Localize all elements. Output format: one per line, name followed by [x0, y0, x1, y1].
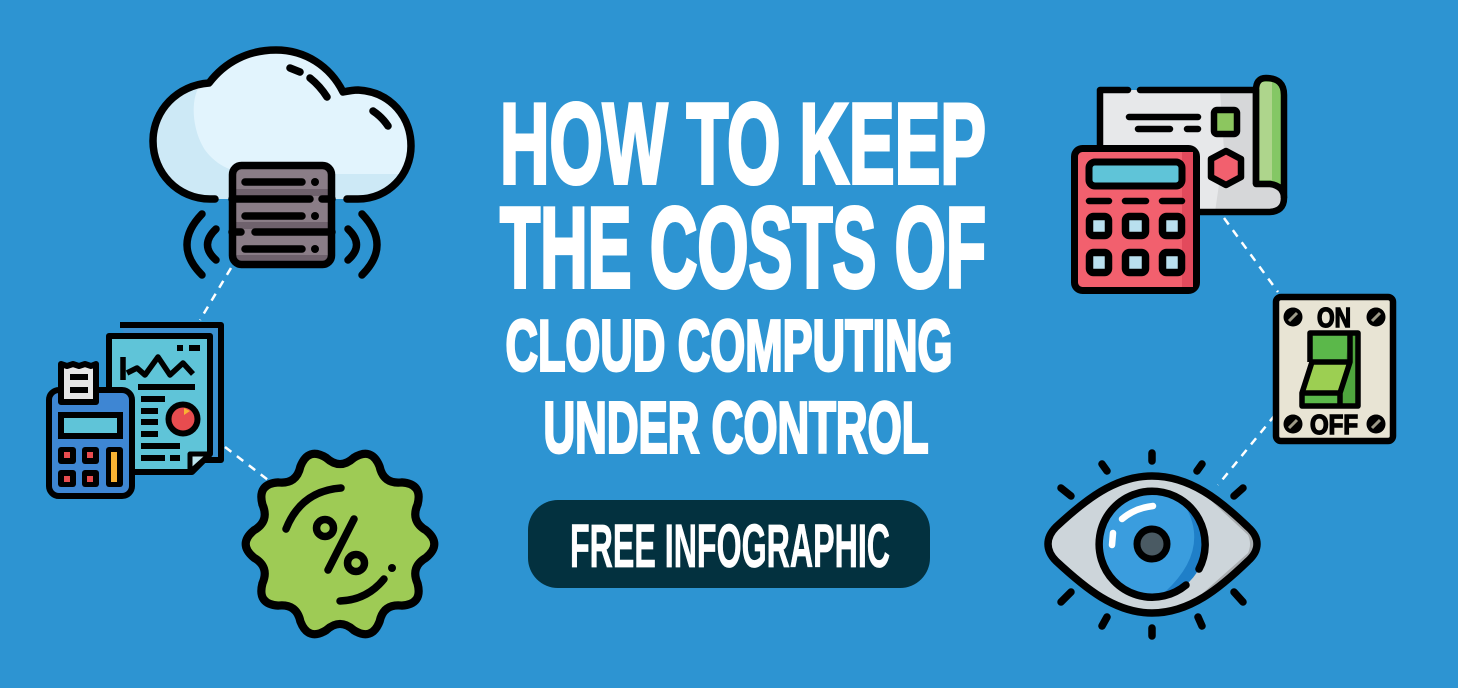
icon: blueprint and calculator — [1074, 78, 1284, 290]
icon: cloud server — [153, 40, 420, 275]
dashed connector: switch to eye — [1218, 415, 1275, 485]
icon: on/off switch: OFF — [1310, 409, 1358, 440]
icon: report and payment terminal — [49, 325, 221, 496]
dashed connector: cloud to report — [200, 268, 231, 320]
icon: discount badge — [246, 454, 434, 634]
title: THE COSTS OF — [500, 185, 986, 312]
button: free infographic: FREE INFOGRAPHIC — [570, 512, 890, 580]
dashed connector: calculator to switch — [1224, 218, 1278, 292]
button: free infographic — [528, 500, 930, 588]
icon: on/off switch: ON — [1317, 302, 1351, 333]
title: CLOUD COMPUTING — [506, 306, 952, 386]
icon: eye — [1048, 453, 1260, 636]
icon: on/off switch — [1276, 297, 1393, 441]
title: UNDER CONTROL — [544, 388, 928, 468]
title: HOW TO KEEP — [500, 81, 986, 208]
title — [500, 81, 986, 468]
dashed connector: report to discount badge — [225, 447, 272, 483]
